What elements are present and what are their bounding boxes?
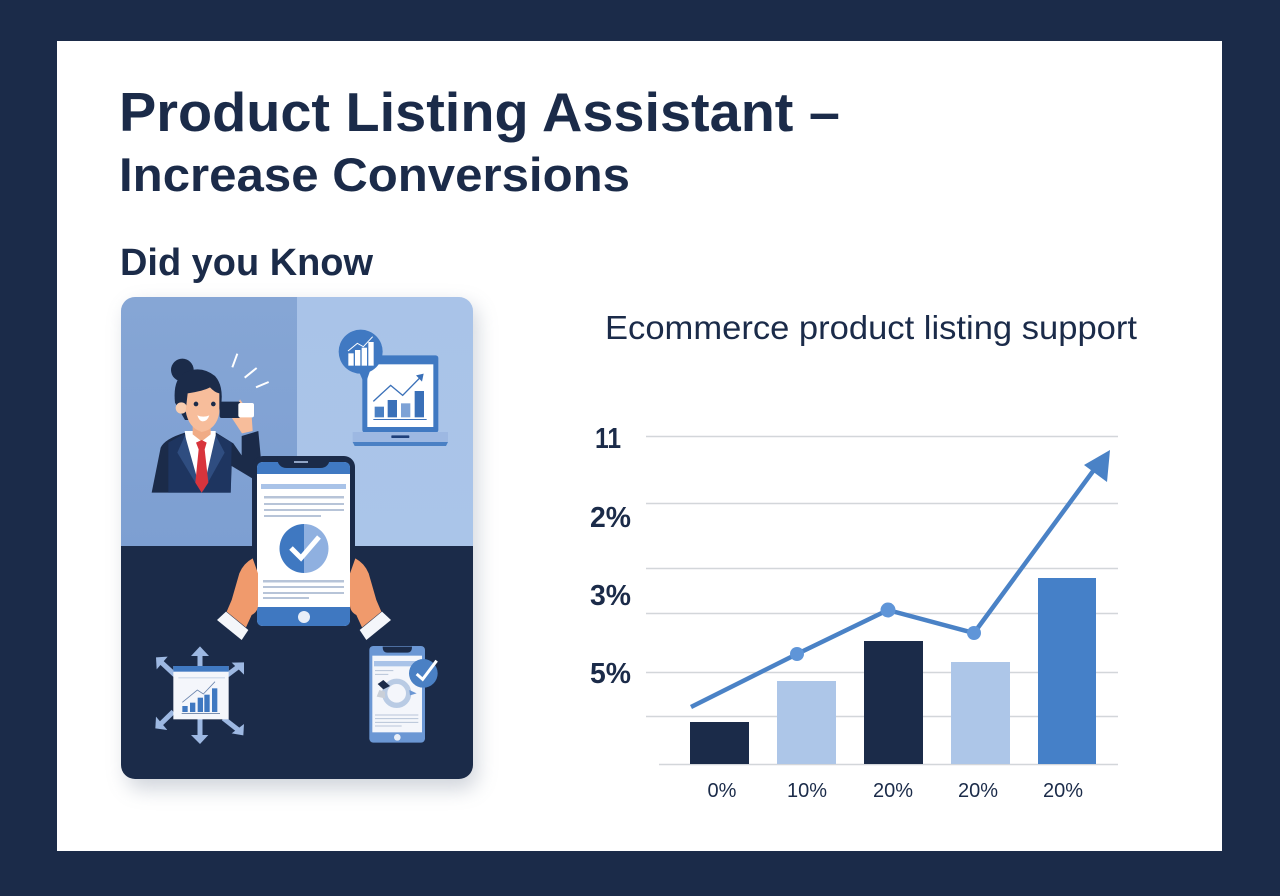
y axis labels: 11 (595, 423, 621, 455)
x axis labels: 10% (787, 780, 827, 802)
y axis labels: 3% (590, 580, 631, 612)
icon: hands holding phone (217, 456, 391, 640)
icon: businessperson on phone (152, 354, 269, 493)
x axis labels: 20% (1043, 780, 1083, 802)
title: Product Listing Assistant – (119, 81, 840, 143)
chart: bars and trend line (590, 423, 1118, 802)
bars (690, 578, 1096, 764)
heading: did you know: Did you Know (120, 242, 373, 284)
y axis labels: 2% (590, 502, 631, 534)
title: Increase Conversions (119, 148, 630, 201)
y axis labels (590, 423, 631, 690)
title (119, 81, 840, 201)
icon: laptop with chart (339, 330, 448, 446)
trend arrow (691, 450, 1110, 707)
x axis labels (708, 780, 1083, 802)
x axis labels: 0% (708, 780, 737, 802)
icon: phone with check badge (369, 646, 438, 743)
icon: window with expanding arrows (155, 646, 244, 744)
x axis labels: 20% (958, 780, 998, 802)
panel: illustration (121, 297, 477, 789)
chart title: Ecommerce product listing support (605, 309, 1137, 346)
y axis labels: 5% (590, 658, 631, 690)
x axis labels: 20% (873, 780, 913, 802)
